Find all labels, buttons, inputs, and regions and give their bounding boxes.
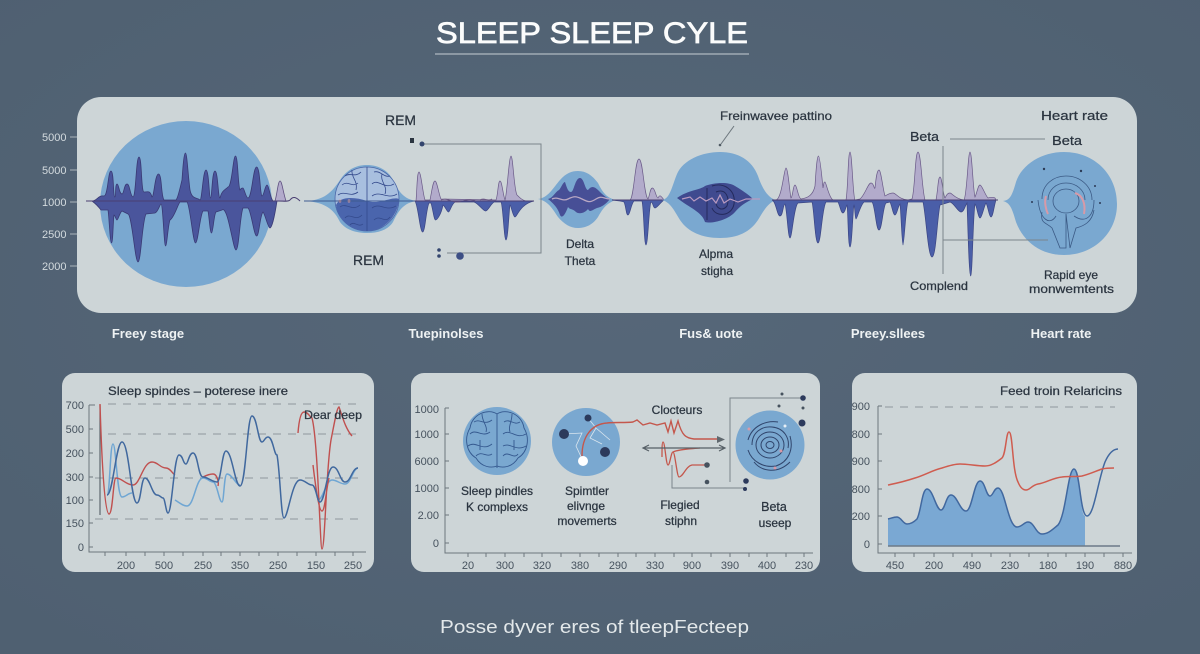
left axis labels (42, 132, 77, 273)
panel: sleep features: 300 (496, 560, 514, 572)
dark blue line (107, 416, 358, 518)
left axis labels: 1000 (42, 197, 66, 209)
panel: heart rate relation chart: 0 (864, 539, 870, 551)
brain circle: REM (304, 165, 418, 233)
panel: heart rate relation chart: 880 (1114, 560, 1132, 572)
panel: main brainwave timeline (77, 97, 1137, 313)
chart title: Feed troin Relaricins (1000, 384, 1122, 398)
red trace with arrows (582, 420, 749, 491)
panel: heart rate relation chart: 800 (852, 429, 870, 441)
title: SLEEP SLEEP CYLE (436, 17, 748, 50)
feature labels: stiphn (665, 514, 697, 528)
main panel labels: Alpma (699, 247, 733, 261)
left axis labels: 2500 (42, 229, 66, 241)
left axis labels: 5000 (42, 132, 66, 144)
panel: heart rate relation chart: 490 (963, 560, 981, 572)
chart title: Sleep spindes – poterese inere (108, 384, 288, 398)
panel: sleep spindles chart: 100 (66, 495, 84, 507)
panel: sleep spindles chart: 200 (66, 448, 84, 460)
panel: sleep features: 320 (533, 560, 551, 572)
waveform: alpha to right circle (772, 152, 998, 276)
feature labels: useep (759, 516, 792, 530)
panel: sleep spindles chart: 150 (307, 560, 325, 572)
main panel labels (353, 108, 1114, 296)
panel: heart rate relation chart: 800 (852, 484, 870, 496)
stage labels (112, 326, 1091, 341)
panel: sleep features: 2.00 (418, 510, 439, 522)
main panel labels: stigha (701, 264, 733, 278)
waveform: REM to delta (415, 156, 534, 240)
feature labels: movemerts (557, 514, 617, 528)
feature labels: elivnge (567, 499, 605, 513)
panel: sleep features: 0 (433, 538, 439, 550)
main panel labels: Rapid eye (1044, 268, 1098, 282)
feature labels: Sleep pindles (461, 484, 533, 498)
panel: sleep features: 1000 (415, 483, 439, 495)
red line (100, 404, 352, 549)
feature labels: Clocteurs (652, 403, 702, 417)
panel: sleep features: 380 (571, 560, 589, 572)
red line (888, 432, 1114, 490)
panel: heart rate relation chart: 200 (925, 560, 943, 572)
light blue line (107, 444, 358, 506)
icon: brain (463, 407, 531, 475)
panel: heart rate relation chart: 190 (1076, 560, 1094, 572)
panel: heart rate relation chart: 900 (852, 401, 870, 413)
alpha circle (662, 152, 776, 238)
left axis labels: 2000 (42, 261, 66, 273)
panel: sleep features: 390 (721, 560, 739, 572)
stage labels: Preey.sllees (851, 326, 925, 341)
panel: sleep features: 900 (683, 560, 701, 572)
panel: sleep spindles chart: 350 (231, 560, 249, 572)
panel: sleep spindles chart: 300 (66, 472, 84, 484)
connector: pattern label pointer (719, 126, 734, 146)
panel: sleep features: 230 (795, 560, 813, 572)
main panel labels: Heart rate (1041, 108, 1108, 123)
panel: sleep spindles chart: 500 (66, 424, 84, 436)
feature labels (461, 403, 792, 530)
connector: beta lines (943, 139, 1048, 274)
panel: heart rate relation chart: 230 (1001, 560, 1019, 572)
right brain circle (1003, 152, 1117, 255)
stage labels: Tuepinolses (409, 326, 483, 341)
panel: sleep features: 6000 (415, 456, 439, 468)
icon: spiral circle with bracket (730, 392, 806, 482)
waveform: delta to alpha (612, 159, 668, 245)
panel: heart rate relation chart (852, 373, 1137, 572)
footer caption: Posse dyver eres of tleepFecteep (440, 617, 749, 637)
feature labels: Beta (761, 500, 787, 514)
chart callout: Dear deep (304, 408, 362, 422)
big circle with waveform (86, 121, 300, 287)
panel: heart rate relation chart: 450 (886, 560, 904, 572)
stage labels: Freey stage (112, 326, 184, 341)
panel: sleep spindles chart: 250 (269, 560, 287, 572)
panel: sleep features (411, 373, 820, 572)
panel: heart rate relation chart: 900 (852, 456, 870, 468)
area series (888, 469, 1085, 546)
connector: REM bracket (410, 138, 541, 260)
feature labels: Spimtler (565, 484, 609, 498)
panel: sleep features: 1000 (415, 404, 439, 416)
panel: sleep spindles chart: 0 (78, 542, 84, 554)
panel: sleep spindles chart: 250 (344, 560, 362, 572)
feature labels: Flegied (660, 498, 700, 512)
panel: sleep spindles chart (62, 373, 374, 572)
panel: sleep features: 330 (646, 560, 664, 572)
left axis labels: 5000 (42, 165, 66, 177)
panel: sleep spindles chart: 700 (66, 400, 84, 412)
panel: sleep spindles chart: 250 (194, 560, 212, 572)
stage labels: Fus& uote (679, 326, 743, 341)
stage labels: Heart rate (1031, 326, 1091, 341)
panel: sleep features: 290 (609, 560, 627, 572)
main panel labels: REM (385, 112, 416, 128)
panel: sleep spindles chart: 200 (117, 560, 135, 572)
delta circle (538, 171, 616, 228)
panel: sleep features: 400 (758, 560, 776, 572)
feature labels: K complexs (466, 500, 528, 514)
main panel labels: Complend (910, 279, 968, 293)
panel: sleep spindles chart: 150 (66, 518, 84, 530)
main panel labels: monwemtents (1029, 282, 1114, 296)
panel: sleep features: 20 (462, 560, 474, 572)
panel: sleep spindles chart: 500 (155, 560, 173, 572)
main panel labels: Freinwavee pattino (720, 109, 832, 123)
panel: heart rate relation chart: 200 (852, 511, 870, 523)
main panel labels: Delta (566, 237, 594, 251)
panel: sleep features: 1000 (415, 429, 439, 441)
panel: heart rate relation chart: 180 (1039, 560, 1057, 572)
main panel labels: Beta (910, 129, 940, 144)
main panel labels: REM (353, 252, 384, 268)
main panel labels: Beta (1052, 133, 1083, 148)
main panel labels: Theta (565, 254, 596, 268)
icon: neuron circle (552, 408, 620, 476)
